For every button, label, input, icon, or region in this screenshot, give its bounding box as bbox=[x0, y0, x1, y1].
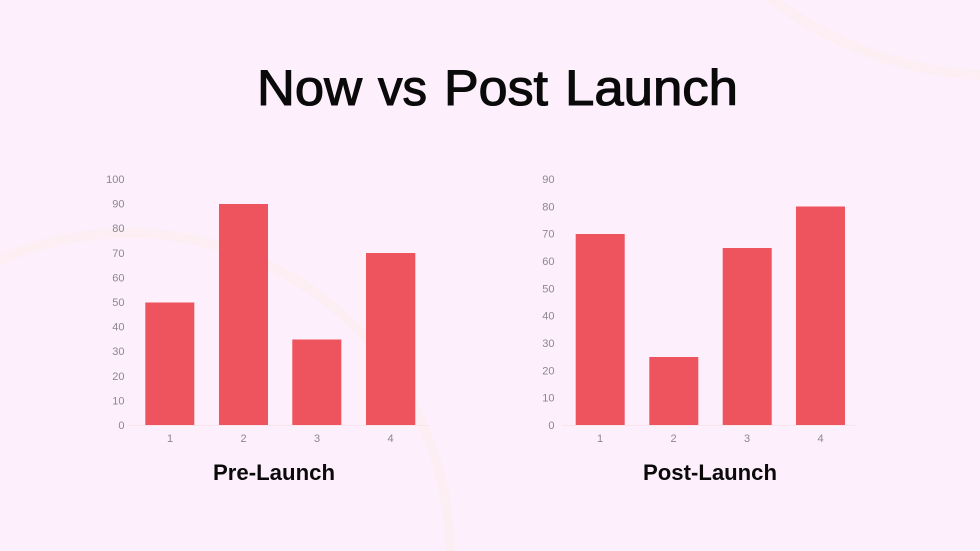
y axis labels: pre-launch: 60 bbox=[112, 272, 124, 284]
y axis labels: pre-launch: 20 bbox=[112, 371, 124, 383]
y axis labels: post-launch: 10 bbox=[542, 393, 554, 405]
x axis labels: pre-launch bbox=[167, 433, 394, 445]
caption: post-launch: Post-Launch bbox=[643, 460, 777, 485]
y axis labels: post-launch: 20 bbox=[542, 365, 554, 377]
x axis labels: pre-launch: 4 bbox=[387, 433, 394, 445]
y axis labels: pre-launch: 10 bbox=[112, 395, 124, 407]
title bbox=[257, 60, 738, 116]
y axis labels: pre-launch: 90 bbox=[112, 199, 124, 211]
y axis labels: post-launch: 70 bbox=[542, 229, 554, 241]
y axis labels: post-launch: 60 bbox=[542, 256, 554, 268]
y axis labels: pre-launch: 30 bbox=[112, 346, 124, 358]
y axis labels: pre-launch: 0 bbox=[118, 420, 124, 432]
caption: pre-launch: Pre-Launch bbox=[213, 460, 335, 485]
x axis labels: pre-launch: 3 bbox=[314, 433, 320, 445]
title: Now bbox=[257, 60, 363, 116]
y axis labels: pre-launch: 40 bbox=[112, 322, 124, 334]
y axis labels: post-launch bbox=[542, 174, 554, 432]
panel: pre-launch bar chart bbox=[106, 174, 428, 485]
panel: post-launch bar chart bbox=[542, 174, 857, 485]
title: Launch bbox=[565, 60, 738, 116]
x axis labels: post-launch: 2 bbox=[670, 433, 677, 445]
bars: post-launch bbox=[576, 206, 845, 425]
y axis labels: pre-launch bbox=[106, 174, 124, 432]
title: Post bbox=[444, 60, 548, 116]
x axis labels: post-launch: 4 bbox=[817, 433, 824, 445]
title: vs bbox=[378, 60, 427, 116]
x axis labels: pre-launch: 2 bbox=[240, 433, 247, 445]
y axis labels: pre-launch: 80 bbox=[112, 223, 124, 235]
y axis labels: pre-launch: 100 bbox=[106, 174, 124, 186]
x axis labels: post-launch: 1 bbox=[597, 433, 603, 445]
y axis labels: pre-launch: 50 bbox=[112, 297, 124, 309]
y axis labels: post-launch: 0 bbox=[548, 420, 554, 432]
y axis labels: post-launch: 50 bbox=[542, 283, 554, 295]
x axis labels: post-launch bbox=[597, 433, 824, 445]
x axis labels: post-launch: 3 bbox=[744, 433, 750, 445]
y axis labels: post-launch: 30 bbox=[542, 338, 554, 350]
x axis labels: pre-launch: 1 bbox=[167, 433, 173, 445]
y axis labels: pre-launch: 70 bbox=[112, 248, 124, 260]
y axis labels: post-launch: 80 bbox=[542, 201, 554, 213]
y axis labels: post-launch: 40 bbox=[542, 311, 554, 323]
bars: pre-launch bbox=[145, 204, 415, 425]
y axis labels: post-launch: 90 bbox=[542, 174, 554, 186]
